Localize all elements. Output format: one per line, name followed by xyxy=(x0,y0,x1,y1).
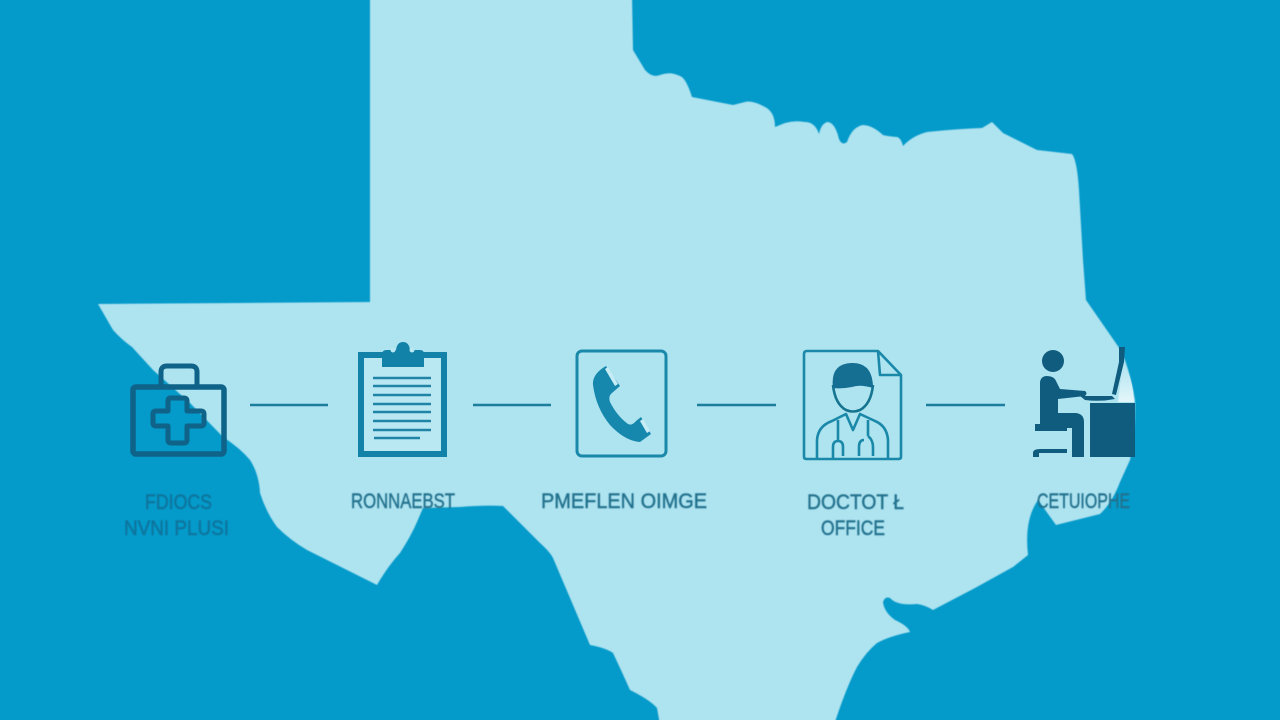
label: step 5: CETUIOPHE xyxy=(1037,490,1130,513)
label: step 1: NVNI PLUSI xyxy=(124,517,229,540)
label: step 4 xyxy=(807,491,904,540)
icon: clipboard xyxy=(361,342,444,454)
label: step 3: PMEFLEN OIMGE xyxy=(541,490,707,513)
step 4: doctor document xyxy=(804,351,904,540)
icon: phone handset in frame xyxy=(577,351,666,456)
connector 3 xyxy=(697,404,776,406)
step 3: phone xyxy=(541,351,707,513)
label: step 4: OFFICE xyxy=(821,517,885,540)
label: step 1: FDIOCS xyxy=(145,491,212,514)
label: step 2: RONNAEBST xyxy=(351,490,455,513)
connector 4 xyxy=(926,404,1005,406)
connector 1 xyxy=(250,404,328,406)
step 5: person at desk xyxy=(1033,347,1135,513)
step 2: clipboard xyxy=(351,342,455,513)
icon: doctor on document xyxy=(804,351,901,459)
step 1: first aid kit xyxy=(124,366,229,540)
connector 2 xyxy=(473,404,551,406)
icon: medical bag xyxy=(133,366,224,454)
icon: person at computer desk xyxy=(1033,347,1135,457)
label: step 1 xyxy=(124,491,229,540)
label: step 4: DOCTOT Ł xyxy=(807,491,904,514)
